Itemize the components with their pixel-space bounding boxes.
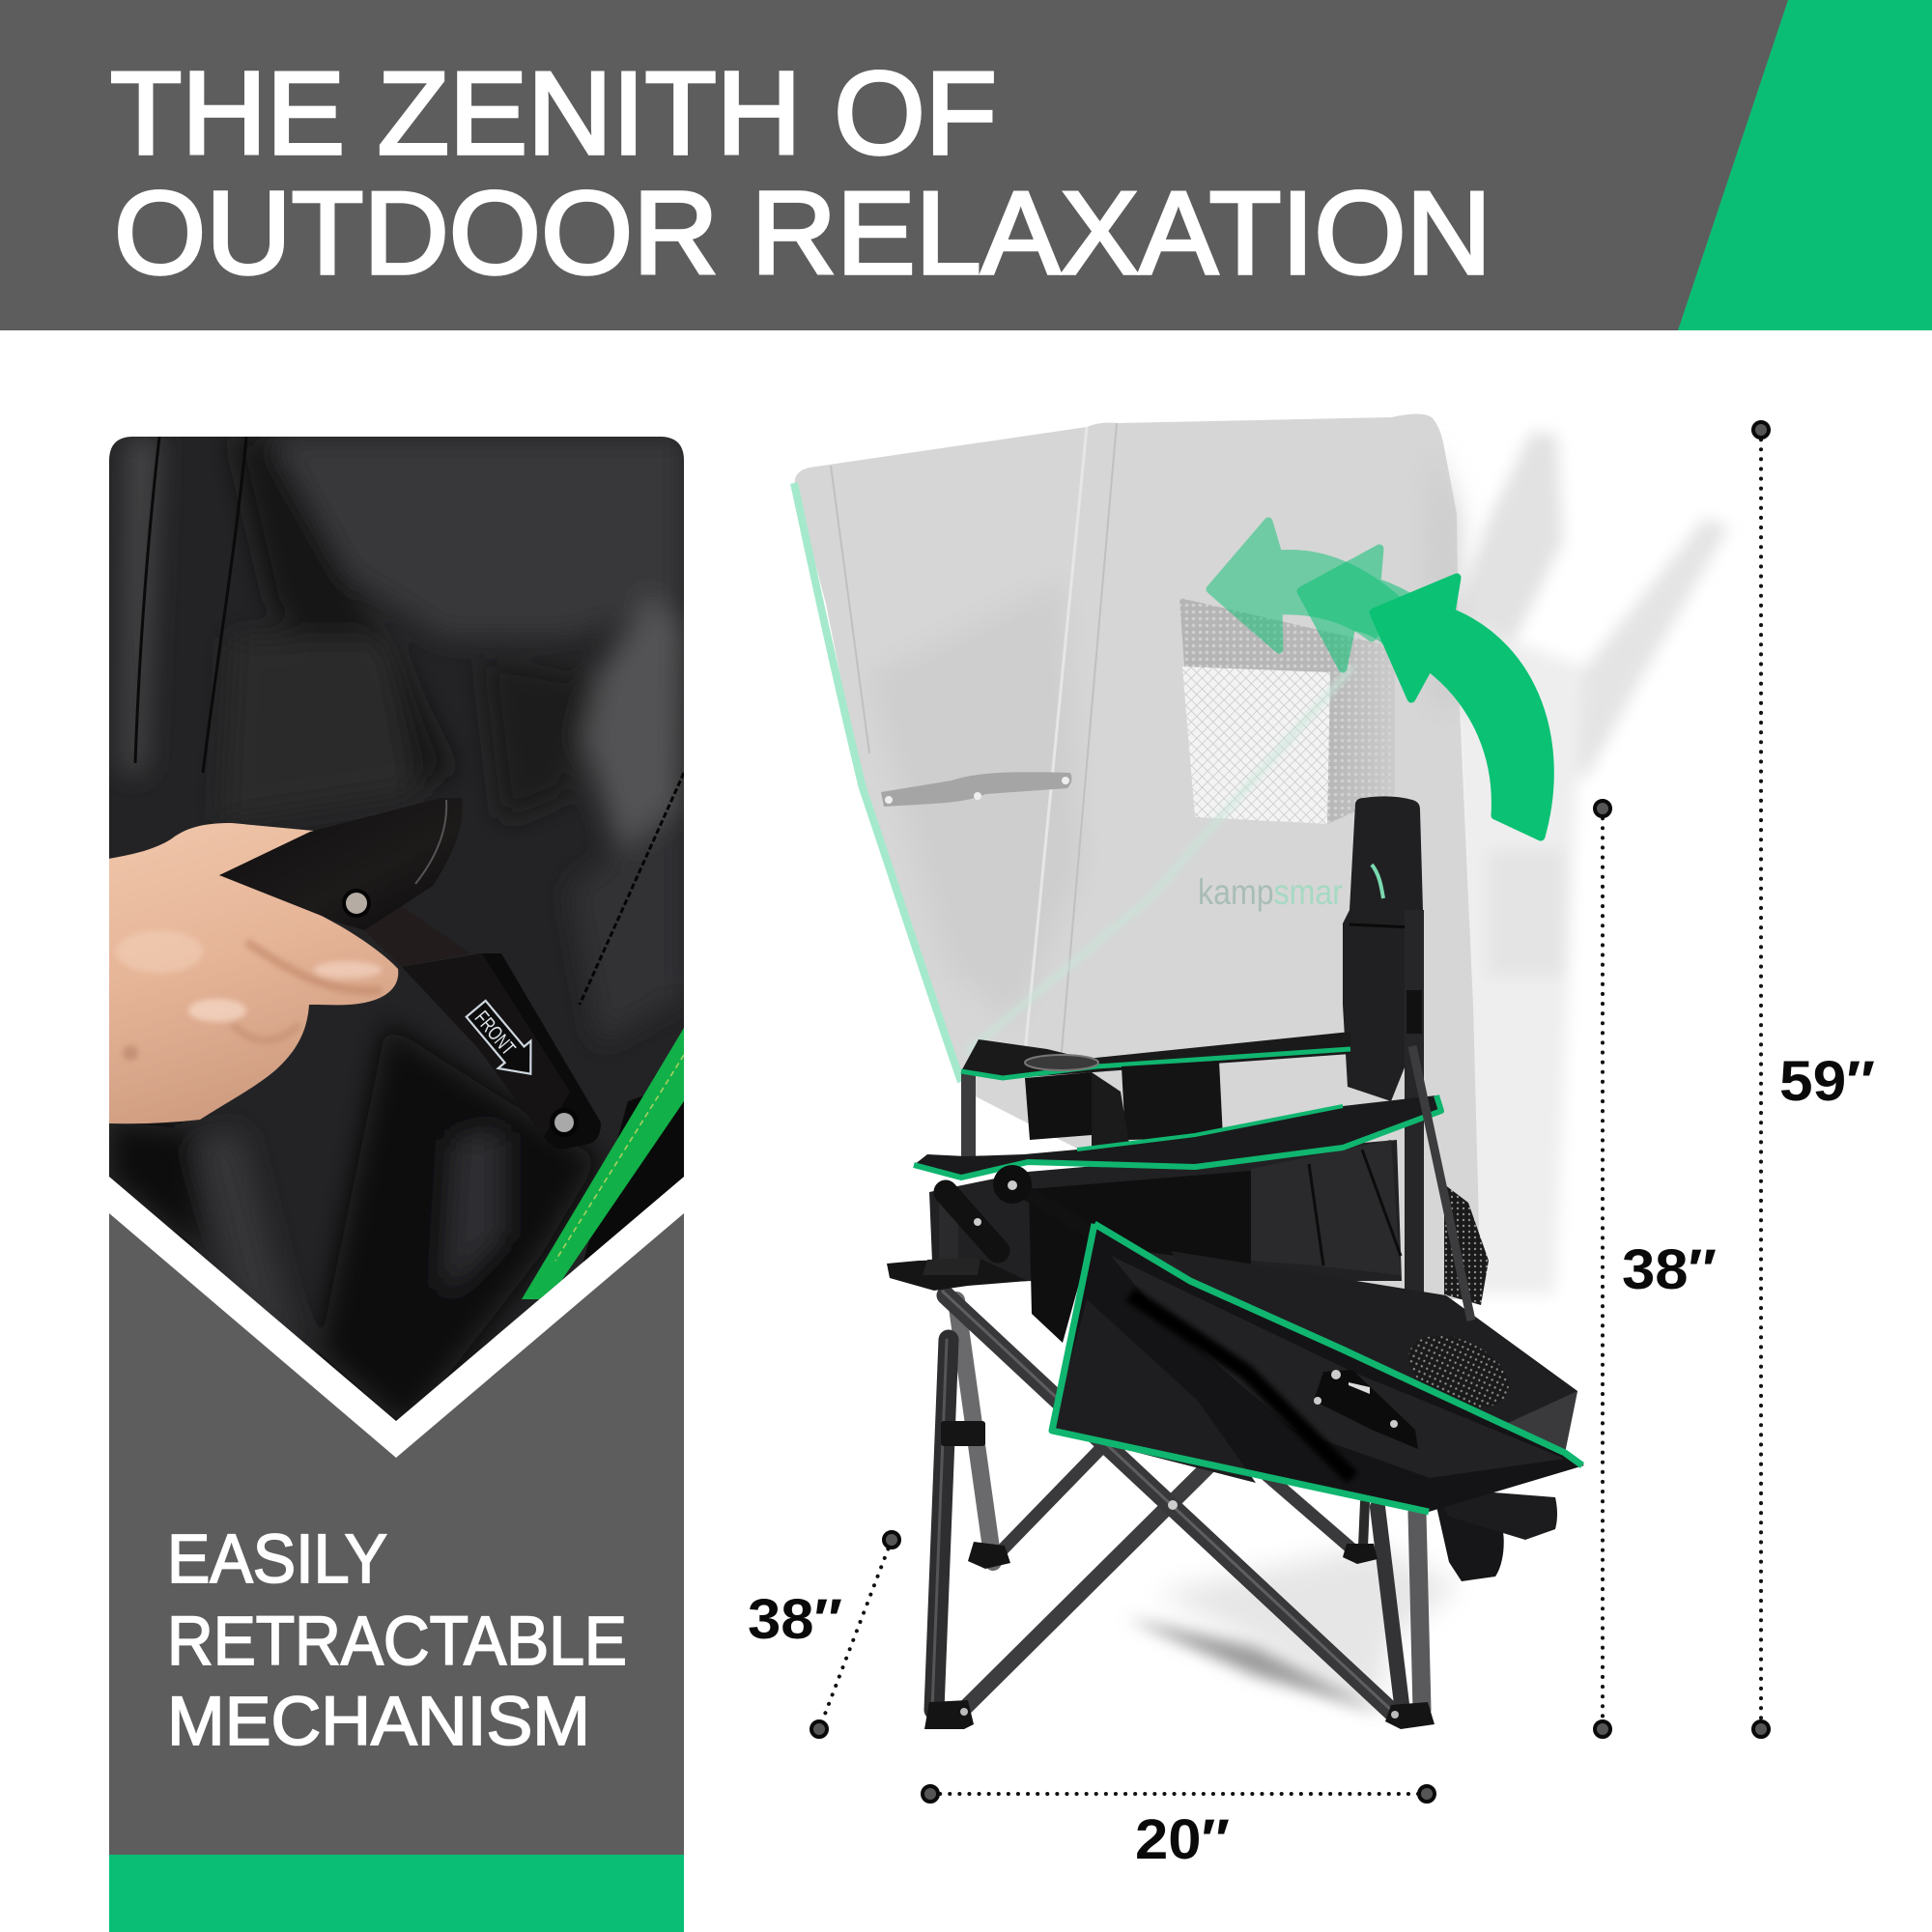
seat back fabric: [929, 1140, 1402, 1343]
rivet: upper: [342, 889, 371, 918]
ghost latch: [881, 772, 1071, 807]
arrow: second ghost: [1301, 549, 1420, 668]
inner seat: [1171, 1251, 1577, 1453]
hanging pouch: [1432, 1485, 1504, 1581]
middle latch piece: [364, 906, 470, 967]
title: OUTDOOR RELAXATION: [114, 167, 1492, 298]
title: [110, 47, 1492, 298]
dimension: 38 inch depth: [748, 1532, 899, 1737]
ghost white pocket: [1182, 667, 1330, 824]
ghost brand: kampsmar: [1198, 872, 1343, 912]
rivet: lower: [550, 1109, 574, 1132]
chair legs: [932, 1292, 1422, 1715]
panel: retractable mechanism: [108, 437, 684, 1932]
ghost streak: [966, 667, 1352, 1053]
dimension: 20 inch width: 20″: [1135, 1808, 1230, 1871]
floor shadow: [1126, 1546, 1459, 1712]
ghost: reclined canopy: [794, 413, 1481, 1299]
photo: hand pulling latch: [108, 437, 684, 1432]
hand shading: [116, 930, 382, 1061]
FRONT arrow label: FRONT: [470, 1007, 520, 1060]
leg clamp: [941, 1421, 985, 1446]
fabric behind strap: [583, 1095, 684, 1263]
dimension: 59 inch height: [1753, 422, 1875, 1737]
side latch joint: [946, 1165, 1096, 1251]
green corner accent: [1678, 0, 1932, 330]
dimension: 38 inch height: [1595, 801, 1717, 1737]
arrow: solid recline: [1374, 578, 1549, 837]
caption: RETRACTABLE: [167, 1604, 627, 1680]
diagonal strap: [1412, 1046, 1471, 1321]
seat back and headrest: [1343, 796, 1424, 1296]
dimension: 38 inch depth: 38″: [748, 1588, 842, 1651]
gray text block background: [109, 1213, 684, 1932]
black mesh bundle: [1398, 1321, 1520, 1422]
near armrest: [914, 1095, 1441, 1178]
dimension: 20 inch width: [923, 1786, 1435, 1871]
ghost mesh pocket: [1179, 598, 1395, 824]
lower latch arm: [482, 953, 601, 1150]
far armrest: [961, 1032, 1350, 1163]
lower bag roll: [1432, 1488, 1557, 1540]
upper latch piece: [219, 798, 463, 930]
pivot rivet: [1168, 1500, 1178, 1510]
green strap: [522, 1028, 684, 1299]
folded footrest flap: [1052, 1224, 1584, 1512]
hand: [108, 823, 398, 1123]
caption: EASILY: [167, 1521, 387, 1598]
gray seat patch: [1506, 1391, 1577, 1453]
chair feet: [924, 1542, 1435, 1729]
ghost canopy green edge: [794, 483, 961, 1082]
caption: MECHANISM: [167, 1684, 590, 1760]
chair: [887, 796, 1584, 1729]
arrow: third ghost: [1210, 522, 1396, 649]
header banner: [0, 0, 1932, 330]
title: THE ZENITH OF: [110, 47, 997, 179]
seams: [203, 437, 246, 773]
dimension: 59 inch height: 59″: [1779, 1050, 1875, 1113]
mesh side pocket: [1444, 1184, 1489, 1305]
caption: [167, 1521, 627, 1760]
dimension: 38 inch height: 38″: [1622, 1238, 1717, 1301]
green footer bar: [109, 1855, 684, 1932]
flap latch: [1314, 1370, 1418, 1449]
near arm post and foot pad: [887, 1192, 1028, 1291]
ghost: blurred rear chair positions: [1449, 432, 1729, 1294]
